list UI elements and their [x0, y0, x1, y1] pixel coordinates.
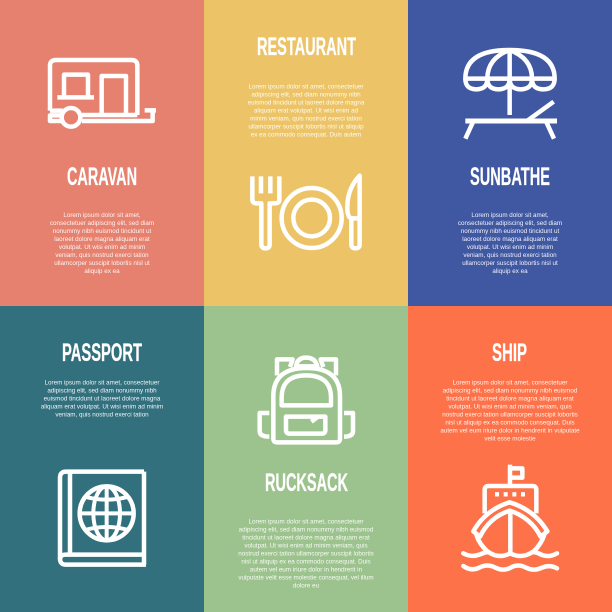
panel: ship	[408, 306, 612, 612]
text block: rucksack: tincidunt ut laoreet dolore magna aliquam erat	[242, 534, 370, 542]
text block: sunbathe: Lorem ipsum dolor sit amet,	[471, 212, 549, 219]
panel: sunbathe	[408, 0, 612, 306]
text block: rucksack: volutpat. Ut wisi enim ad minim veniam, quis	[244, 542, 368, 550]
text block: rucksack: adipiscing elit, sed diam nonummy nibh euismod	[239, 526, 374, 534]
text block: restaurant: aliquam erat volutpat. Ut wisi enim ad	[254, 108, 359, 114]
text block: caravan: veniam, quis nostrud exerci tation	[55, 252, 149, 259]
text block: passport: aliquam erat volutpat. Ut wisi enim ad minim	[41, 404, 163, 410]
text block: caravan: laoreet dolore magna aliquam erat	[54, 236, 150, 243]
text block: ship	[440, 380, 580, 442]
text block: ship: nisl ut aliquip ex ea commodo consequat. Duis	[445, 420, 575, 426]
text block: restaurant: minim veniam, quis nostrud exerci tation	[250, 116, 362, 122]
text block: sunbathe: veniam, quis nostrud exerci tation	[463, 252, 557, 259]
text block: ship: nostrud exerci tation ullamcorper suscipit lobortis	[442, 412, 578, 418]
text block: restaurant: Lorem ipsum dolor sit amet, consectetuer	[249, 84, 363, 90]
text block: passport: Lorem ipsum dolor sit amet, consectetuer	[45, 380, 159, 386]
icon: rucksack	[260, 358, 353, 442]
text block: passport: adipiscing elit, sed diam nonummy nibh	[47, 388, 157, 394]
text block: caravan: consectetuer adipiscing elit, sed diam	[50, 220, 154, 227]
text block: ship: autem vel eum iriure dolor in hendrerit in vulputate	[440, 428, 580, 434]
heading: rucksack: RUCKSACK	[265, 469, 348, 497]
text block: passport: euismod tincidunt ut laoreet dolore magna	[44, 396, 161, 402]
text block: rucksack: nostrud exerci tation ullamcorper suscipit lobortis	[238, 550, 374, 558]
text block: rucksack: nisl ut aliquip ex ea commodo consequat. Duis	[241, 558, 371, 566]
text block: caravan	[50, 212, 154, 275]
panel: passport	[0, 306, 204, 612]
text block: ship: velit esse molestie	[484, 436, 536, 442]
text block: rucksack	[238, 518, 374, 590]
text block: restaurant: ex ea commodo consequat. Duis autem	[251, 132, 361, 138]
text block: rucksack: autem vel eum iriure dolor in hendrerit in	[250, 566, 363, 574]
text block: passport	[41, 380, 163, 418]
text block: ship: adipiscing elit, sed diam nonummy nibh euismod	[443, 388, 578, 394]
icon: fork, plate and knife	[252, 176, 360, 248]
text block: passport: veniam, quis nostrud exerci tation	[55, 412, 149, 418]
text block: caravan: Lorem ipsum dolor sit amet,	[63, 212, 141, 219]
text block: rucksack: dolore eu	[293, 582, 320, 590]
panel: rucksack	[204, 306, 408, 612]
text block: sunbathe: ullamcorper suscipit lobortis nisl ut	[462, 260, 558, 267]
text block: ship: tincidunt ut laoreet dolore magna aliquam erat	[446, 396, 574, 402]
text block: caravan: ullamcorper suscipit lobortis nisl ut	[54, 260, 150, 267]
heading: passport: PASSPORT	[62, 339, 142, 367]
text block: restaurant: adipiscing elit, sed diam nonummy nibh	[251, 92, 361, 98]
text block: ship: Lorem ipsum dolor sit amet, consectetuer	[453, 380, 567, 386]
icon: ship on waves	[463, 465, 557, 570]
heading: sunbathe: SUNBATHE	[470, 163, 550, 191]
text block: rucksack: vulputate velit esse molestie consequat, vel illum	[238, 574, 374, 582]
text block: sunbathe: consectetuer adipiscing elit, sed diam	[458, 220, 562, 227]
text block: ship: volutpat. Ut wisi enim ad minim veniam, quis	[448, 404, 572, 410]
text block: sunbathe: volutpat. Ut wisi enim ad minim	[467, 244, 553, 251]
icon: beach umbrella and lounger	[465, 50, 557, 139]
text block: restaurant: euismod tincidunt ut laoreet dolore magna	[248, 100, 365, 106]
text block: caravan: nonummy nibh euismod tincidunt ut	[53, 228, 152, 235]
text block: sunbathe: nonummy nibh euismod tincidunt ut	[461, 228, 560, 235]
text block: rucksack: Lorem ipsum dolor sit amet, consectetuer	[249, 518, 363, 526]
panel: caravan	[0, 0, 204, 306]
heading: ship: SHIP	[492, 339, 527, 367]
icon: passport with globe	[60, 472, 146, 565]
text block: sunbathe	[458, 212, 562, 275]
heading: restaurant: RESTAURANT	[257, 33, 356, 61]
text block: sunbathe: laoreet dolore magna aliquam erat	[462, 236, 558, 243]
text block: restaurant: ullamcorper suscipit lobortis nisl ut aliquip	[248, 124, 364, 130]
text block: caravan: volutpat. Ut wisi enim ad minim	[59, 244, 145, 251]
text block: restaurant	[248, 84, 365, 138]
text block: caravan: aliquip ex ea	[84, 268, 120, 275]
icon: caravan	[50, 60, 156, 127]
heading: caravan: CARAVAN	[67, 163, 137, 191]
panel: restaurant	[204, 0, 408, 306]
text block: sunbathe: aliquip ex ea	[492, 268, 528, 275]
